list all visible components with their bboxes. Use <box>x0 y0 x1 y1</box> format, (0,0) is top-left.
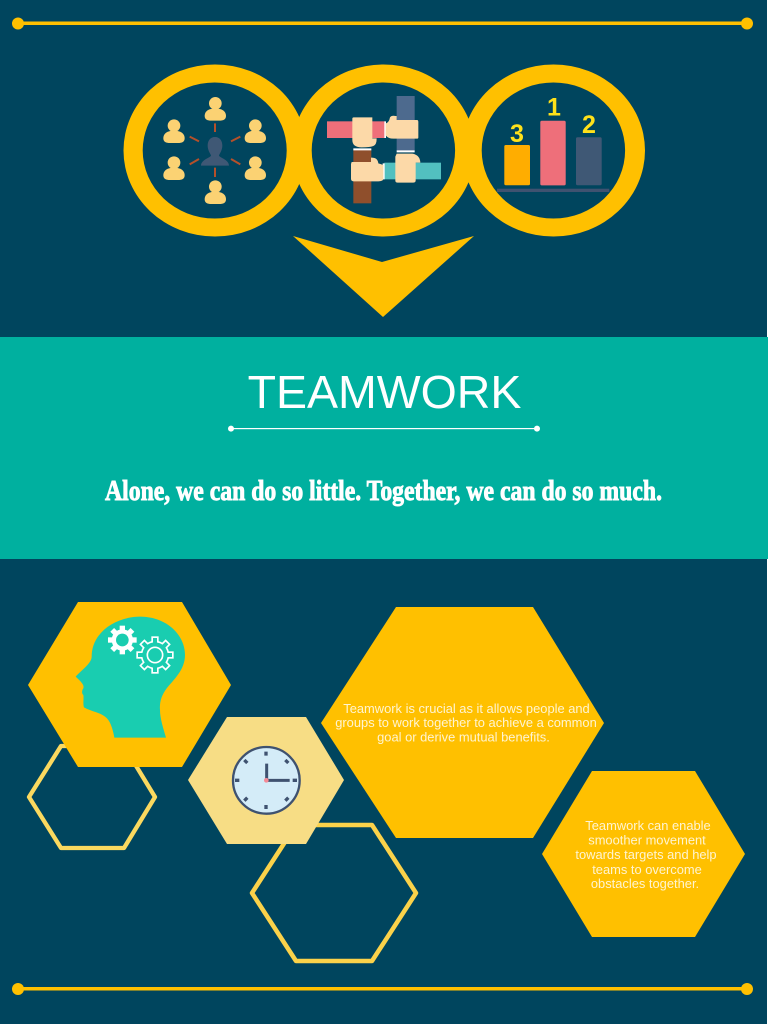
rank labels: 2 <box>582 111 596 139</box>
rank labels: 3 <box>510 120 524 148</box>
text block: Teamwork is crucial as it allows people and <box>343 701 590 716</box>
arrow pointing down <box>293 236 474 317</box>
ring trio <box>124 64 645 237</box>
icon: head with gears <box>76 617 185 738</box>
title: TEAMWORK <box>248 366 521 418</box>
icon: network of people <box>163 97 266 204</box>
large hexagon with text <box>321 607 604 838</box>
small hexagon with text <box>542 771 745 937</box>
text block <box>335 701 597 745</box>
bottom rule <box>12 983 753 995</box>
hexagon with head icon <box>28 602 231 767</box>
text block <box>575 818 717 891</box>
hexagon with clock <box>188 717 344 844</box>
icon: clock <box>233 747 300 814</box>
outline hexagon left <box>29 746 155 848</box>
text block: smoother movement <box>588 832 706 848</box>
icon: four linked hands <box>327 96 441 203</box>
rank labels <box>510 94 596 148</box>
text block: Teamwork can enable <box>585 818 711 833</box>
quote: Alone, we can do so little. Together, we can do so much. <box>105 475 662 507</box>
text block: goal or derive mutual benefits. <box>377 730 550 745</box>
text block: obstacles together. <box>591 876 699 891</box>
text block: groups to work together to achieve a common <box>335 715 597 730</box>
rank labels: 1 <box>547 94 561 122</box>
icon: podium bar chart <box>497 94 609 192</box>
text block: teams to overcome <box>592 862 702 877</box>
title band <box>0 337 768 559</box>
outline hexagon centre <box>252 825 416 961</box>
text block: towards targets and help <box>575 847 717 862</box>
title underline <box>228 426 540 432</box>
top rule <box>12 18 753 30</box>
